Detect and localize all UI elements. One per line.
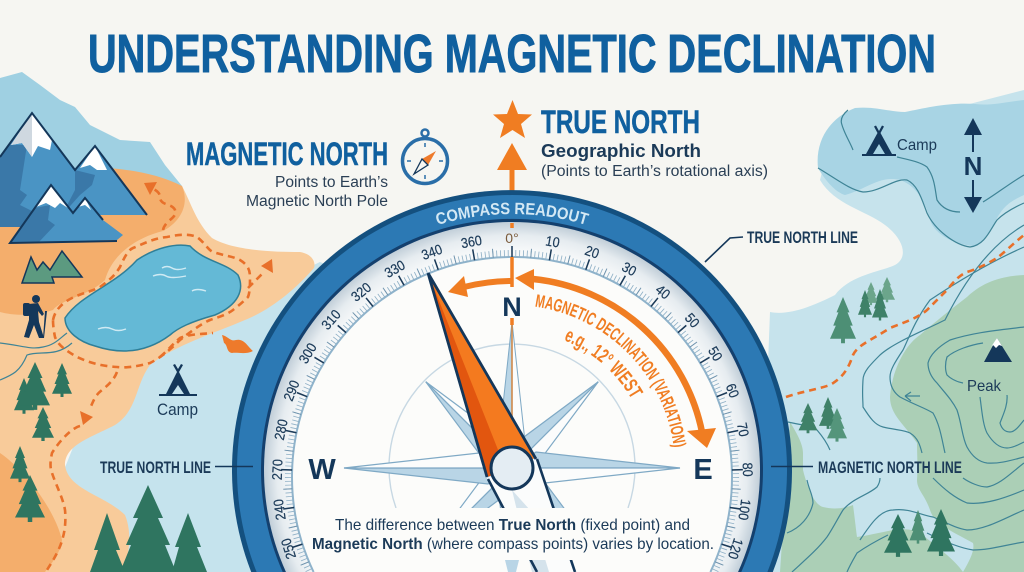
declination label: MAGNETIC DECLINATION (VARIATION) [535, 294, 686, 447]
degree numbers: 0° [505, 230, 519, 246]
icon: mountains [0, 113, 147, 243]
right camp: Camp [897, 137, 937, 154]
icon: small green mountains [22, 251, 82, 283]
degree numbers: 290 [280, 378, 303, 403]
left camp: Camp [157, 400, 198, 419]
degree numbers: 40 [653, 281, 674, 303]
compass inner face [292, 257, 732, 572]
cardinal letters [308, 292, 713, 486]
compass dial [264, 222, 760, 572]
magnetic north heading [186, 136, 388, 210]
degree numbers: 280 [271, 417, 291, 441]
callout: true north line top: TRUE NORTH LINE [747, 228, 858, 247]
lake [65, 245, 241, 351]
compass needle [428, 273, 536, 477]
callout: true north line left: TRUE NORTH LINE [100, 458, 211, 477]
compass [232, 190, 792, 572]
caption band [345, 508, 680, 560]
icon: true north star [493, 100, 532, 138]
declination value: e.g., 12° WEST [565, 331, 644, 397]
right camp [862, 126, 937, 156]
degree numbers: 100 [735, 498, 754, 521]
compass ring label: COMPASS READOUT [436, 202, 590, 224]
map north arrow: N [964, 151, 982, 181]
magnetic north heading: MAGNETIC NORTH [186, 136, 388, 172]
true north heading: TRUE NORTH [541, 104, 700, 140]
dashed trail [53, 235, 250, 367]
true north heading: (Points to Earth’s rotational axis) [541, 163, 768, 180]
peak marker [967, 338, 1012, 395]
degree numbers: 10 [544, 232, 561, 251]
needle hub [491, 447, 533, 489]
caption: Magnetic North (where compass points) varies by location. [312, 536, 714, 553]
degree numbers: 70 [734, 421, 752, 438]
true north heading [541, 104, 768, 180]
peak marker: Peak [967, 378, 1002, 395]
icon: magnetic compass [402, 130, 448, 184]
dashed trail east [786, 235, 1024, 397]
caption: The difference between True North (fixed point) and [335, 517, 690, 534]
degree numbers: 300 [295, 340, 320, 366]
degree numbers: 20 [583, 242, 602, 262]
cardinal letters: N [502, 292, 522, 322]
icon: hiker [23, 295, 47, 338]
right map terrain [760, 90, 1024, 572]
degree numbers: 120 [725, 536, 747, 561]
north arrow [497, 143, 527, 192]
degree numbers: 270 [269, 459, 285, 480]
degree numbers: 30 [619, 258, 640, 279]
degree numbers: 50 [682, 310, 703, 331]
degree numbers: 250 [277, 536, 299, 561]
degree numbers: 340 [419, 241, 445, 263]
orange island [222, 335, 253, 353]
degree numbers [269, 230, 756, 561]
magnetic north heading: Magnetic North Pole [246, 193, 388, 210]
degree numbers: 310 [318, 306, 344, 333]
degree numbers: 330 [382, 257, 408, 281]
compass south point [505, 560, 519, 572]
callout: true north line top [705, 228, 858, 262]
degree numbers: 50 [705, 344, 726, 364]
green peak land [890, 275, 1024, 572]
cardinal letters: E [693, 454, 713, 486]
degree ticks [287, 252, 737, 572]
degree numbers: 240 [270, 498, 289, 521]
streams [0, 333, 72, 380]
caption [312, 517, 714, 553]
compass outer ring [232, 190, 792, 572]
lake ripples [98, 266, 206, 330]
right trees [798, 277, 955, 557]
upper lake [818, 100, 1024, 246]
compass needle tail [487, 458, 577, 572]
left map terrain [0, 72, 420, 572]
callout: magnetic north line: MAGNETIC NORTH LINE [818, 458, 962, 477]
true north axis line [510, 223, 514, 325]
degree numbers: 320 [348, 279, 374, 305]
true north heading: Geographic North [541, 141, 701, 161]
map north arrow [964, 118, 982, 213]
compass rose [344, 322, 680, 565]
left trees [10, 362, 207, 572]
degree numbers: 80 [740, 462, 756, 477]
trail arrowheads [80, 182, 273, 425]
degree numbers: 360 [460, 232, 483, 251]
arrow: magnetic declination [515, 269, 716, 448]
degree numbers: 60 [723, 381, 743, 400]
contour lines [863, 225, 1024, 453]
arrow: toward magnetic north [448, 276, 512, 297]
cardinal letters: W [308, 454, 336, 486]
magnetic north heading: Points to Earth’s [275, 174, 388, 191]
left camp [157, 364, 198, 419]
